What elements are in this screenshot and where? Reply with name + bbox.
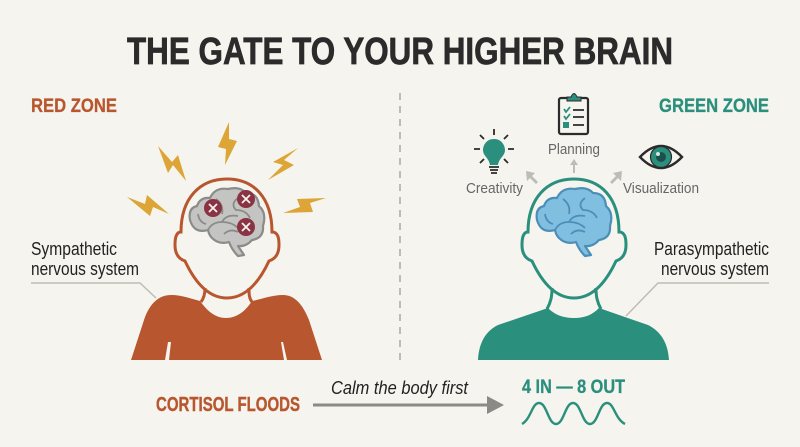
arrow: calm the body first [313, 378, 504, 414]
arrows: brain to functions [526, 159, 622, 184]
icon: light bulb [474, 129, 514, 173]
callout: parasympathetic nervous system: Parasympathetic [654, 239, 769, 259]
shoulders [478, 308, 669, 360]
brain: blue [537, 188, 611, 256]
divider [399, 93, 401, 362]
icon: blocked marks [204, 190, 255, 236]
heading: green zone: GREEN ZONE [659, 96, 769, 117]
title: THE GATE TO YOUR HIGHER BRAIN [127, 31, 673, 73]
figure: red person [131, 179, 322, 360]
shoulders [131, 295, 322, 360]
callout: parasympathetic nervous system: nervous system [661, 259, 769, 279]
callout: sympathetic nervous system: nervous system [31, 259, 139, 279]
panel: red zone [31, 96, 326, 360]
label: creativity: Creativity [466, 180, 523, 197]
heading: red zone: RED ZONE [31, 96, 117, 117]
label: planning: Planning [548, 141, 600, 158]
panel: green zone [466, 94, 769, 360]
arrow: calm the body first: Calm the body first [331, 378, 469, 398]
icons: lightning bolts [127, 122, 326, 216]
label: visualization: Visualization [623, 180, 699, 197]
head outline [522, 179, 626, 309]
callout: sympathetic nervous system: Sympathetic [31, 239, 117, 259]
icon: breath wave [522, 403, 625, 424]
callout: parasympathetic nervous system [626, 239, 769, 316]
icon: clipboard [559, 94, 588, 134]
head outline [175, 179, 279, 302]
icon: eye [640, 146, 682, 168]
label: cortisol floods: CORTISOL FLOODS [156, 394, 300, 416]
brain: grey [190, 188, 264, 256]
figure: green person [478, 179, 669, 360]
callout: sympathetic nervous system [31, 239, 156, 298]
label: 4 in 8 out: 4 IN — 8 OUT [522, 377, 625, 398]
